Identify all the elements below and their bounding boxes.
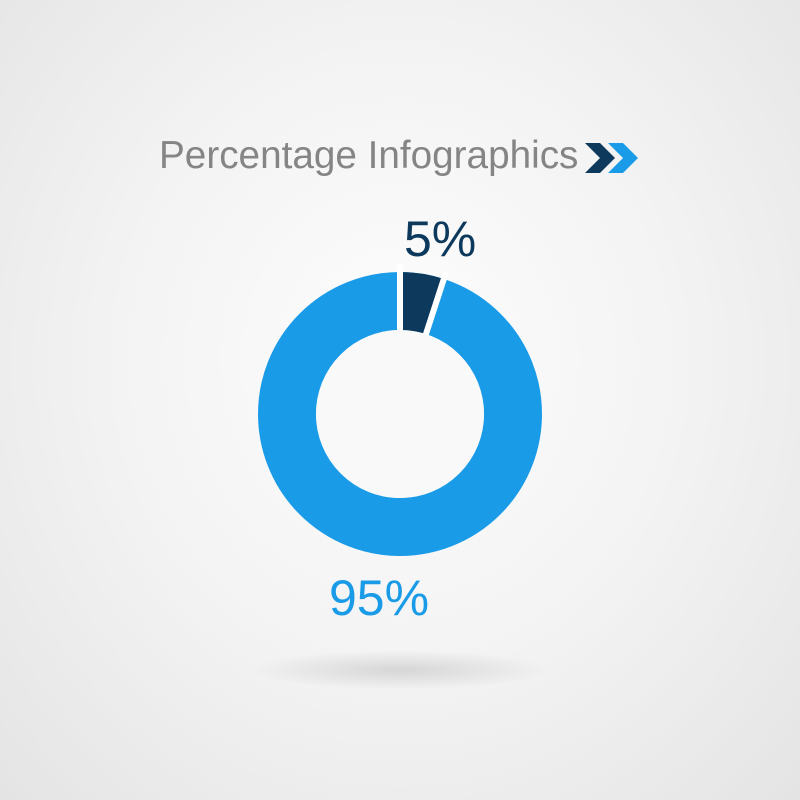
label: 5%: 5% [404,211,476,267]
icon: double chevron [585,143,638,173]
label: 95%: 95% [329,570,429,626]
title: Percentage Infographics [159,134,578,177]
shadow [250,650,550,690]
